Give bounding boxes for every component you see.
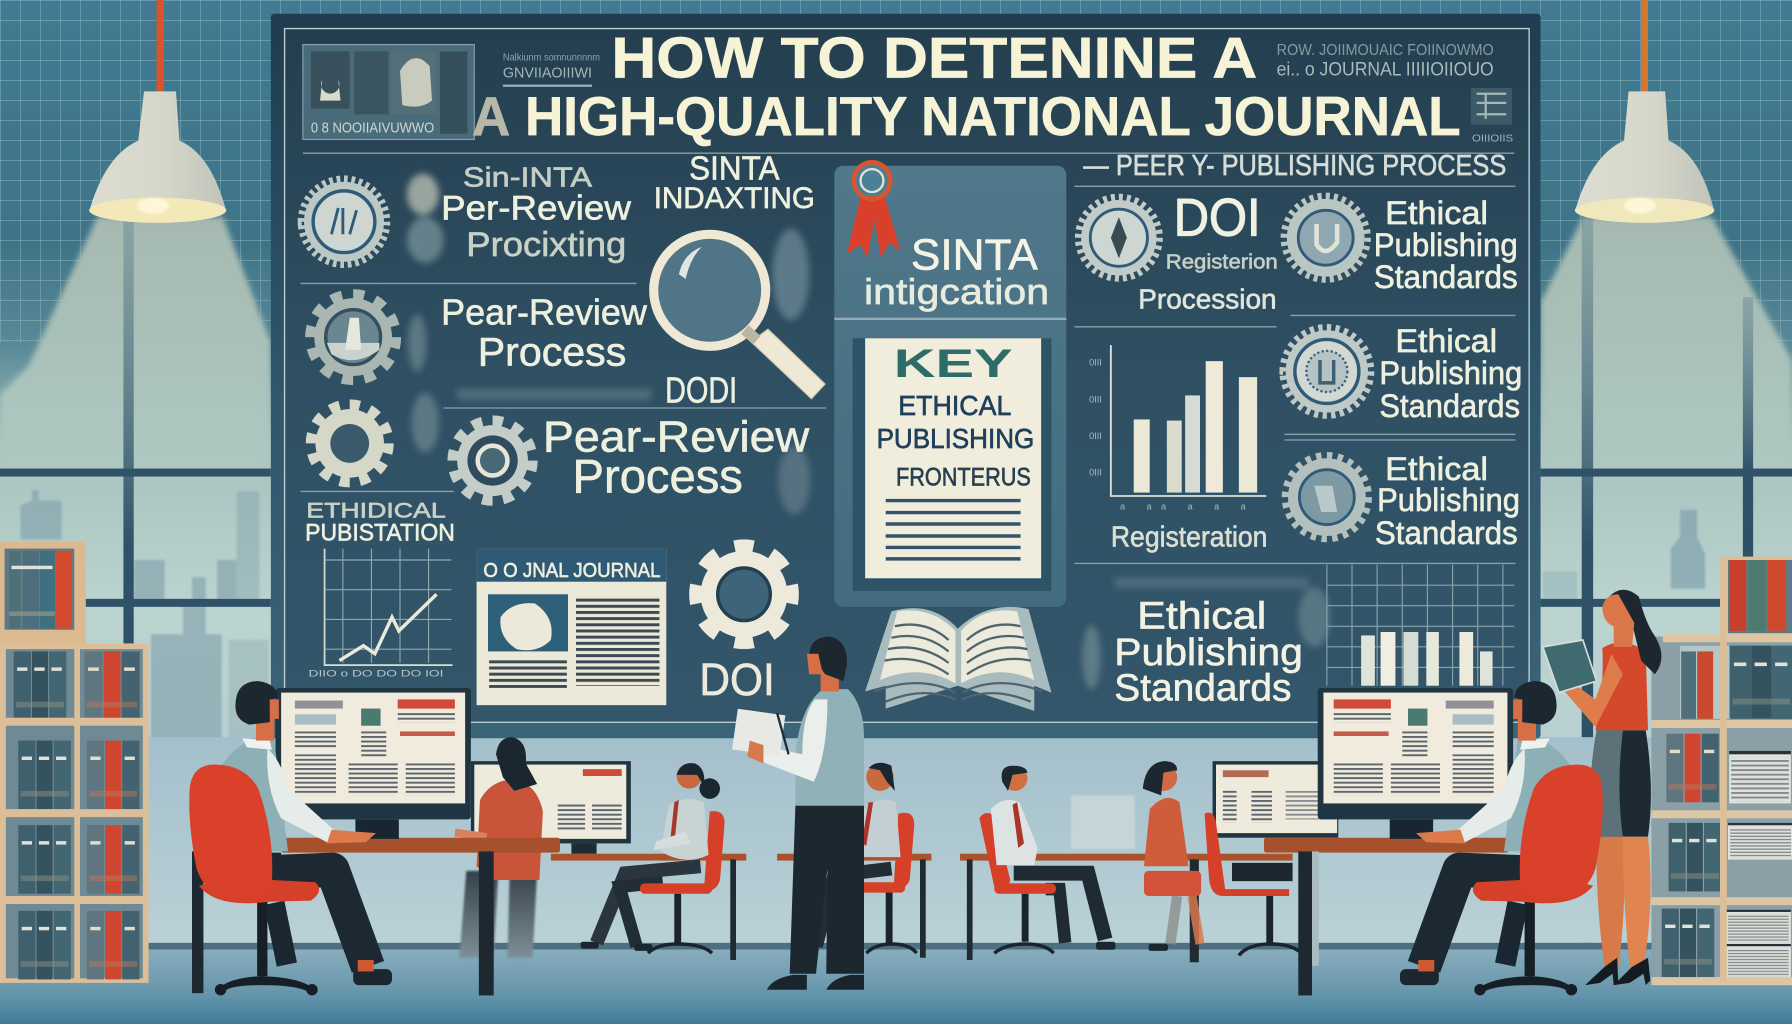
panel: centre SINTA and key document [834, 162, 1066, 607]
journal card [477, 549, 666, 705]
document: key ethical publishing frontiers: KEY [894, 342, 1013, 386]
text block: Ethical Publistation: ETHIDICAL [306, 498, 446, 523]
text block: Ethical Publistation: PUBISTATION [305, 520, 455, 547]
text block: ethical publishing standards one [1374, 195, 1518, 295]
bookshelf: left [0, 542, 149, 983]
text block: SINTA indaxting [654, 150, 815, 215]
board surface [285, 29, 1529, 722]
person: seated woman with red top [454, 737, 631, 958]
text block: Pear-Review Process (upper): Process [478, 331, 626, 375]
text block: ethical publishing standards one: Publishing [1374, 227, 1518, 263]
text block: Pear-Review Process (lower): Pear-Review [543, 413, 810, 461]
bar chart: 0III [1089, 467, 1102, 477]
text block: Sin-INTA Per-Review Procixting: Per-Review [441, 189, 631, 227]
bookshelf: right [1651, 557, 1792, 985]
text block: Pear-Review Process (upper): Pear-Review [441, 292, 647, 333]
text block: Sin-INTA Per-Review Procixting [441, 161, 631, 264]
bar chart: 0III [1089, 358, 1102, 368]
board frame [271, 14, 1541, 738]
desk: front right [1264, 838, 1509, 995]
document: key ethical publishing frontiers: PUBLISHING [877, 423, 1034, 454]
small top caption right: ei.. o JOURNAL IIIIIOIIOUO [1277, 58, 1494, 80]
text block: Ethical Publistation [305, 498, 455, 547]
text: SINTA indication: SINTA [911, 232, 1038, 280]
label: registration: Registeration [1111, 521, 1267, 553]
small top caption left: GNVIIAOIIIWI [503, 66, 592, 82]
bar chart [1089, 345, 1266, 512]
text block: ethical publishing standards large [1114, 595, 1303, 709]
grid bar chart [1327, 565, 1514, 686]
text block: ethical publishing standards two: Standards [1379, 388, 1520, 424]
document: key ethical publishing frontiers: ETHICAL [898, 390, 1011, 421]
panel: top-left thumbnails [303, 45, 474, 139]
text block: ethical publishing standards one: Ethical [1385, 195, 1488, 231]
gear: large DOI [697, 547, 791, 641]
text block: DOI registration process: DOI [1174, 188, 1261, 247]
label: DOI: DOI [699, 654, 775, 705]
text block: DOI registration process: Registerion [1166, 251, 1278, 274]
text block: DOI registration process: Procession [1138, 284, 1277, 315]
small top caption left [503, 53, 600, 87]
gear: third row [312, 406, 387, 481]
city skyline right [1543, 510, 1705, 600]
text block: Pear-Review Process (upper) [441, 292, 647, 375]
text block: ethical publishing standards large: Publishing [1114, 631, 1303, 673]
text: SINTA indication [864, 232, 1049, 312]
text block: ethical publishing standards three [1375, 451, 1520, 551]
title [472, 27, 1461, 147]
bar chart: 0III [1089, 431, 1102, 441]
document: key ethical publishing frontiers [853, 338, 1051, 591]
text block: ethical publishing standards three: Standards [1375, 515, 1518, 551]
text: SINTA indication: intigcation [864, 271, 1049, 312]
seal: DOI [1079, 198, 1159, 278]
text block: ethical publishing standards one: Standards [1374, 259, 1518, 295]
desk: back left [551, 854, 746, 960]
person: seated woman centre-left [581, 763, 725, 953]
text block: ethical publishing standards large: Ethical [1137, 595, 1266, 637]
paper on desk [1071, 795, 1135, 849]
person: standing woman with book [1543, 590, 1661, 985]
person: front right worker in red chair [1400, 681, 1603, 995]
text block: ethical publishing standards large: Standards [1114, 667, 1291, 709]
line chart: DIIO o DO DO DO IOI [309, 669, 443, 679]
title: HOW TO DETENINE A [611, 27, 1257, 91]
text block: ethical publishing standards three: Ethical [1385, 451, 1488, 487]
text block: ethical publishing standards two [1379, 323, 1522, 424]
text block: ethical publishing standards three: Publishing [1377, 482, 1520, 518]
text block: SINTA indaxting: SINTA [689, 150, 780, 187]
gear: peer review [454, 422, 531, 499]
person: seated man behind standing man [816, 763, 917, 953]
small top caption right [1277, 42, 1513, 145]
small top caption left: Nalkiunm somnunnnnm [503, 53, 600, 64]
seal: top-left [302, 179, 386, 264]
bar chart: a aa a a a [1120, 502, 1247, 512]
icon: open book [865, 607, 1051, 711]
light beam: left lamp [0, 217, 271, 480]
text block: DOI registration process [1138, 188, 1278, 315]
heading: peer publishing process: — PEER Y- PUBLISHING PROCESS [1083, 150, 1506, 182]
small top caption right: OIIIOIIS [1472, 134, 1513, 145]
monitor behind [471, 761, 631, 854]
text block: ethical publishing standards two: Publishing [1379, 355, 1522, 391]
gear: second row [312, 296, 394, 378]
text block: Pear-Review Process (lower): Process [573, 451, 743, 503]
divider lines [301, 153, 1515, 563]
lamp: right [1575, 0, 1714, 223]
text block: SINTA indaxting: INDAXTING [654, 182, 815, 215]
lower wall [149, 737, 1657, 943]
seal: ethical one [1285, 197, 1367, 279]
small top caption right: ROW. JOIIMOUAIC FOIINOWMO [1277, 42, 1494, 59]
desk: back centre [777, 854, 931, 958]
desk: front left [192, 838, 560, 995]
right window frame [1541, 217, 1792, 949]
text block: ethical publishing standards two: Ethical [1395, 323, 1497, 359]
line chart [309, 549, 453, 679]
bar chart: 0III [1089, 394, 1102, 404]
person: seated man centre-right [979, 766, 1115, 953]
title: A HIGH-QUALITY NATIONAL JOURNAL [472, 85, 1461, 147]
text block: Sin-INTA Per-Review Procixting: Sin-INTA [463, 161, 593, 192]
person: standing man with paper [732, 637, 864, 990]
person: seated woman centre-right [1143, 761, 1201, 951]
text block: Pear-Review Process (lower) [543, 413, 810, 503]
person: seated man under right desk [1205, 813, 1304, 955]
monitor: front left [275, 688, 471, 839]
icon: red ribbon [847, 162, 901, 258]
monitor: front right [1318, 688, 1513, 839]
seal: ethical two [1283, 328, 1370, 415]
blurred decoration left column [407, 174, 1330, 689]
floor [0, 950, 1792, 1024]
monitor: centre-right [1213, 761, 1338, 838]
text block: Sin-INTA Per-Review Procixting: Procixting [466, 226, 626, 264]
city skyline left [21, 490, 269, 789]
left window frame [0, 217, 271, 949]
seal: ethical three [1286, 456, 1368, 538]
desk: back right [960, 854, 1293, 962]
journal card: O O JNAL JOURNAL [483, 559, 661, 582]
label: DODI: DODI [665, 369, 737, 410]
baseboard [149, 943, 1657, 950]
icon: magnifying glass [654, 234, 825, 399]
lamp: left [89, 0, 226, 223]
person: front left worker in red chair [189, 681, 392, 995]
light beam: right lamp [1541, 217, 1792, 480]
panel: top-left thumbnails: 0 8 NOOIIAIVUWWO [311, 121, 434, 137]
document: key ethical publishing frontiers: FRONTERUS [896, 464, 1031, 492]
